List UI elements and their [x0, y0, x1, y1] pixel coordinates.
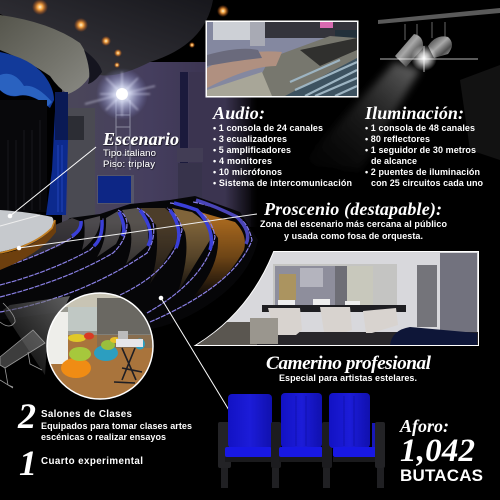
- seats illustration: [218, 393, 385, 488]
- audio list: [212, 103, 352, 188]
- ceiling: [0, 0, 213, 76]
- audio list: • 5 amplificadores: [213, 145, 291, 155]
- iluminacion list: [364, 103, 484, 188]
- armrest: [322, 422, 332, 468]
- proscenio text: Proscenio (destapable):: [263, 199, 442, 220]
- chairs: [268, 308, 302, 335]
- floor: [190, 332, 480, 345]
- capacity: Aforo:: [399, 416, 449, 436]
- keyboard stand: [114, 348, 142, 383]
- class room circle: [47, 293, 153, 399]
- proscenio text: y usada como fosa de orquesta.: [284, 231, 423, 241]
- audio heading: Audio:: [212, 103, 265, 123]
- stage spotlight flare: [85, 68, 155, 120]
- cuarto experimental: Cuarto experimental: [41, 456, 143, 467]
- aisle floor: [21, 208, 245, 294]
- camerino text: Especial para artistas estelares.: [279, 373, 417, 383]
- iluminacion heading: Iluminación:: [364, 103, 464, 123]
- truss: [378, 8, 500, 24]
- salones de clases: Equipados para tomar clases artes: [41, 421, 192, 431]
- light cone: [300, 62, 420, 170]
- camerino text: Camerino profesional: [266, 353, 432, 374]
- iluminacion list: • 1 consola de 48 canales: [365, 123, 475, 133]
- iluminacion list: de alcance: [371, 156, 417, 166]
- leader line: proscenio: [17, 214, 257, 250]
- console photo: [206, 20, 358, 98]
- iluminacion list: • 2 puentes de iluminación: [365, 167, 480, 177]
- armrest: [271, 422, 281, 468]
- escenario text: Piso: triplay: [103, 159, 155, 170]
- cuarto experimental: 1: [19, 443, 37, 483]
- bean bags: [61, 358, 91, 378]
- salones de clases: 2: [17, 396, 36, 436]
- cuarto experimental: [19, 443, 143, 483]
- audio list: • 4 monitores: [213, 156, 272, 166]
- iluminacion list: • 80 reflectores: [365, 134, 430, 144]
- armrest: [375, 422, 385, 488]
- audio list: • 1 consola de 24 canales: [213, 123, 323, 133]
- seating: [0, 196, 258, 330]
- capacity: 1,042: [400, 433, 475, 469]
- mirror: [273, 264, 397, 305]
- flare: [411, 45, 437, 71]
- chair 3: [323, 393, 378, 488]
- escenario text: Tipo italiano: [103, 148, 156, 159]
- blue seat ends: [72, 200, 248, 250]
- chair 1: [218, 394, 272, 488]
- row rims: [0, 202, 252, 322]
- leader line: escenario: [8, 147, 96, 218]
- salones de clases: escénicas o realizar ensayos: [41, 432, 166, 442]
- ceiling lamps: [32, 0, 229, 68]
- salones de clases: [17, 396, 192, 442]
- iluminacion list: con 25 circuitos cada uno: [371, 178, 484, 188]
- salones de clases: Salones de Clases: [41, 409, 133, 420]
- sofa: [390, 327, 477, 345]
- iluminacion list: • 1 seguidor de 30 metros: [365, 145, 476, 155]
- escenario text: Escenario: [102, 129, 179, 149]
- audio list: • 3 ecualizadores: [213, 134, 287, 144]
- dressing room photo: [190, 252, 480, 345]
- projection beam: [3, 296, 70, 375]
- theatre photo: [0, 0, 257, 232]
- capacity: BUTACAS: [400, 466, 483, 485]
- capacity: [399, 416, 483, 485]
- leader line: butacas: [159, 296, 238, 425]
- door mirror: [417, 265, 437, 327]
- seating block: [0, 196, 258, 330]
- audio list: • 10 micrófonos: [213, 167, 282, 177]
- wireframe keyboard: [0, 303, 45, 388]
- faint structure: [460, 65, 500, 160]
- proscenio text: Zona del escenario más cercana al público: [260, 219, 448, 229]
- ladder: [116, 100, 130, 170]
- proscenio text: [260, 199, 448, 241]
- blue side curtain: [46, 92, 68, 215]
- stage platform: [0, 210, 56, 270]
- escenario text: [102, 129, 179, 170]
- back wall: [62, 62, 257, 227]
- left lamp: [395, 34, 423, 67]
- counter: [262, 305, 406, 312]
- door: [97, 175, 134, 204]
- spotlights: [300, 8, 500, 170]
- right lamp: [428, 36, 452, 58]
- speaker: [68, 116, 84, 140]
- dark stage opening: [0, 100, 47, 212]
- wallpaper: [440, 253, 477, 337]
- soffit: [0, 15, 92, 94]
- blue curtain valance: [0, 52, 54, 108]
- audio list: • Sistema de intercomunicación: [213, 178, 352, 188]
- camerino text: [266, 353, 432, 383]
- chair 2: [272, 393, 323, 488]
